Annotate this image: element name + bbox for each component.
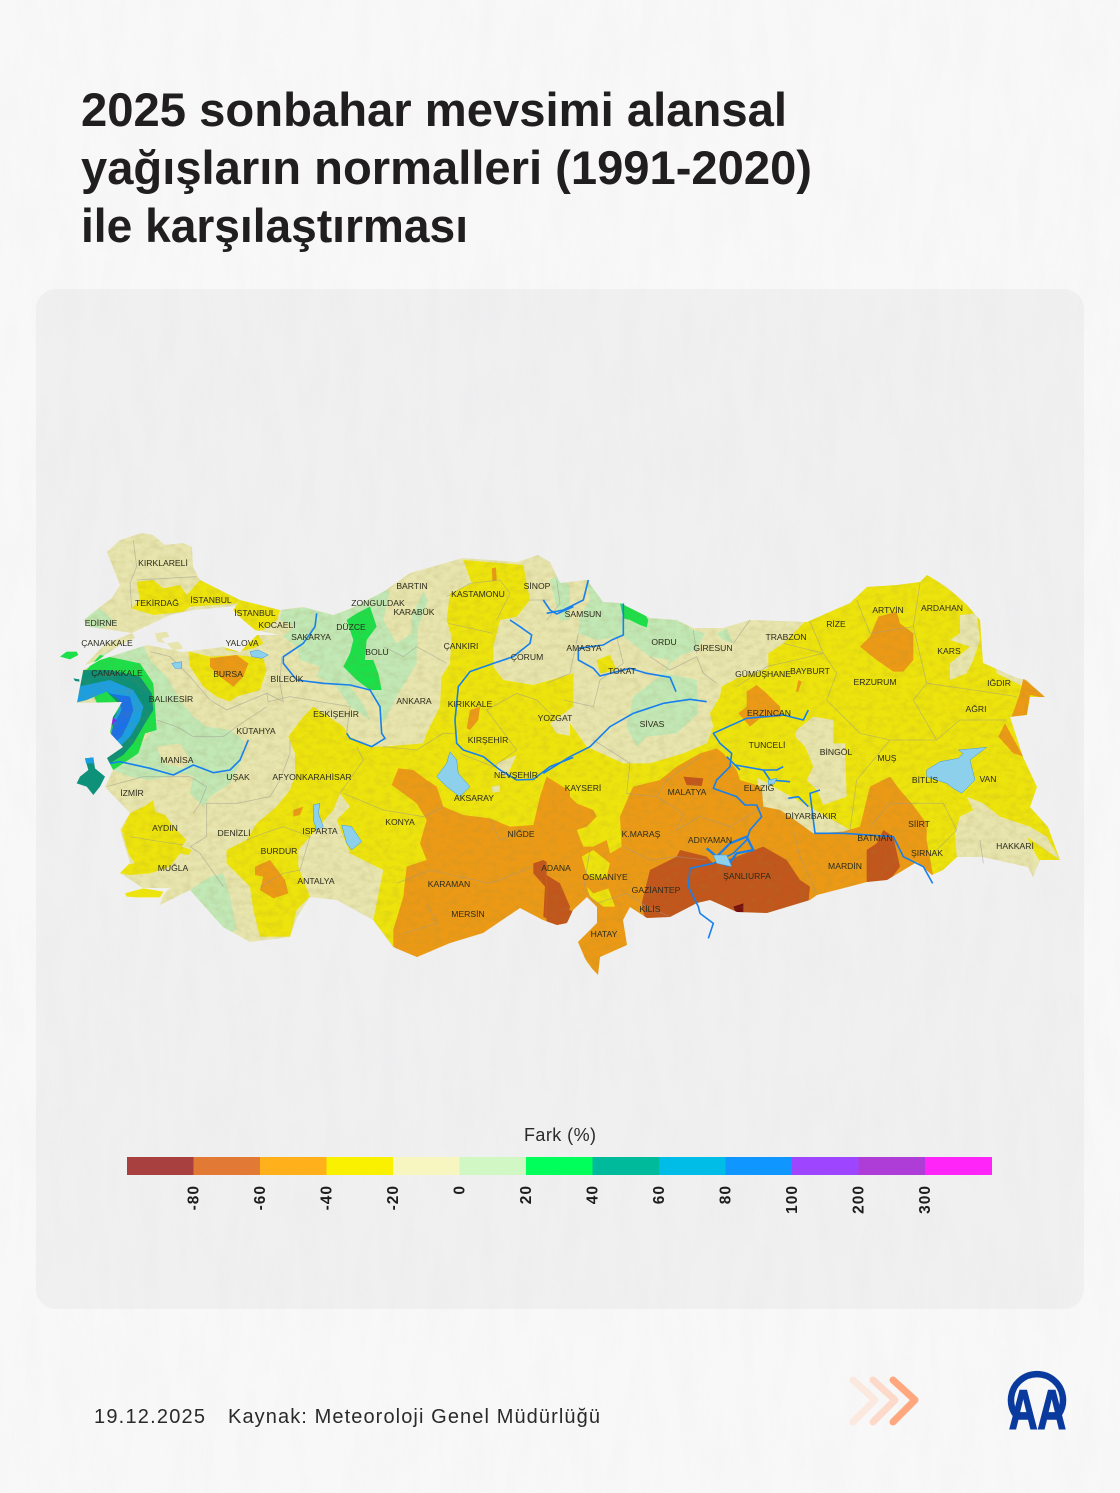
western zones (83, 575, 570, 933)
province labels: KAYSERİ (565, 783, 601, 793)
province labels: GİRESUN (693, 643, 733, 653)
province labels: ANKARA (396, 696, 432, 706)
province labels: AFYONKARAHİSAR (272, 772, 352, 782)
province labels: BURSA (213, 669, 243, 679)
legend colour bar (127, 1157, 992, 1175)
province labels: K.MARAŞ (622, 829, 661, 839)
province labels: ŞANLIURFA (723, 871, 771, 881)
legend title: Fark (%) (524, 1125, 596, 1145)
title: ile karşılaştırması (81, 199, 468, 252)
province labels: ŞIRNAK (911, 848, 943, 858)
province labels: KASTAMONU (451, 589, 505, 599)
province labels: BARTIN (396, 581, 428, 591)
legend tick labels (186, 1185, 934, 1214)
footer source: Kaynak: Meteoroloji Genel Müdürlüğü (228, 1406, 600, 1428)
footer date: 19.12.2025 (94, 1406, 205, 1428)
province labels: YALOVA (225, 638, 259, 648)
province labels: ELAZIĞ (744, 783, 775, 793)
province labels: BİLECİK (271, 674, 304, 684)
province labels: ANTALYA (297, 876, 335, 886)
title: 2025 sonbahar mevsimi alansal (81, 83, 787, 136)
legend tick labels: 0 (452, 1185, 468, 1195)
land colour zones (60, 520, 1070, 990)
province labels: SİİRT (908, 819, 931, 829)
province labels: BALIKESİR (149, 694, 193, 704)
province labels: BİNGÖL (820, 747, 852, 757)
title: yağışların normalleri (1991-2020) (81, 141, 812, 194)
province labels: KIRŞEHİR (468, 735, 508, 745)
legend tick labels: 40 (584, 1185, 602, 1204)
province labels: ADIYAMAN (688, 835, 732, 845)
province labels: NEVŞEHİR (494, 770, 538, 780)
province labels: IĞDIR (987, 678, 1011, 688)
province labels: ORDU (651, 637, 677, 647)
province labels: ERZURUM (854, 677, 896, 687)
title (81, 83, 812, 252)
province labels: KIRKLARELİ (138, 558, 188, 568)
province labels: DİYARBAKIR (785, 811, 837, 821)
legend tick labels: -60 (252, 1185, 269, 1210)
panel: map card (36, 289, 1084, 1309)
province labels: İSTANBUL (234, 608, 276, 618)
province labels: KARAMAN (428, 879, 470, 889)
offshore islands (60, 632, 183, 897)
province labels: ISPARTA (302, 826, 338, 836)
province labels: ESKİŞEHİR (313, 709, 359, 719)
icon: AA logo: AA (1009, 1378, 1066, 1441)
province labels: AYDIN (152, 823, 178, 833)
province labels: BAYBURT (790, 666, 831, 676)
legend tick labels: -40 (318, 1185, 336, 1210)
icon: AA logo (1009, 1374, 1066, 1441)
province labels: ZONGULDAK (351, 598, 405, 608)
province labels: SAKARYA (291, 632, 331, 642)
province labels: ÇANAKKALE (81, 638, 133, 648)
province labels: ARDAHAN (921, 603, 963, 613)
province labels: TOKAT (608, 666, 637, 676)
province labels: ERZİNCAN (747, 708, 791, 718)
province labels: OSMANİYE (582, 872, 628, 882)
province labels: HAKKARİ (996, 841, 1034, 851)
province labels: SİNOP (524, 581, 551, 591)
legend tick labels: 80 (718, 1185, 734, 1204)
province labels: RİZE (826, 619, 846, 629)
province labels: ÇANKIRI (444, 641, 478, 651)
province labels: UŞAK (226, 772, 250, 782)
province labels: GÜMÜŞHANE (735, 669, 791, 679)
province labels: EDİRNE (85, 618, 117, 628)
province labels: KÜTAHYA (236, 726, 276, 736)
legend tick labels: -20 (385, 1185, 402, 1210)
province labels: MANİSA (161, 755, 194, 765)
province labels: İSTANBUL (190, 595, 232, 605)
province labels: İZMİR (120, 788, 144, 798)
province labels: AMASYA (566, 643, 602, 653)
province labels: YOZGAT (538, 713, 573, 723)
legend tick labels: 100 (784, 1185, 801, 1214)
province labels: SİVAS (640, 719, 665, 729)
province labels: SAMSUN (565, 609, 601, 619)
province labels: KOCAELİ (258, 620, 296, 630)
province labels: BATMAN (857, 833, 893, 843)
province labels: MALATYA (668, 787, 707, 797)
province labels: MARDİN (828, 861, 862, 871)
legend tick labels: 60 (651, 1185, 668, 1204)
eastern zones (578, 580, 733, 747)
province labels: AKSARAY (454, 793, 494, 803)
province labels: TUNCELİ (749, 740, 785, 750)
province labels: NİĞDE (507, 829, 535, 839)
province labels: DÜZCE (336, 622, 366, 632)
province labels: BOLU (365, 647, 389, 657)
province labels: KİLİS (639, 904, 661, 914)
province borders (107, 540, 1017, 933)
province labels: KARABÜK (393, 607, 435, 617)
province labels: MUĞLA (158, 863, 189, 873)
province labels: KARS (937, 646, 961, 656)
Canakkale wet gradient (83, 655, 157, 770)
legend tick labels: 200 (850, 1185, 868, 1214)
icon: chevrons (853, 1380, 915, 1422)
province labels: GAZİANTEP (632, 885, 681, 895)
map: Turkey precipitation anomaly (60, 520, 1070, 990)
province labels: KONYA (385, 817, 415, 827)
province labels: BİTLİS (912, 775, 938, 785)
province labels (81, 558, 1034, 939)
rivers and lakes (110, 580, 987, 938)
legend tick labels: -80 (186, 1185, 202, 1210)
legend tick labels: 300 (917, 1185, 934, 1214)
province labels: HATAY (591, 929, 618, 939)
province labels: DENİZLİ (218, 828, 250, 838)
legend (127, 1125, 992, 1214)
province labels: BURDUR (261, 846, 297, 856)
province labels: KIRIKKALE (448, 699, 492, 709)
province labels: ÇORUM (511, 652, 543, 662)
province labels: ARTVİN (872, 605, 904, 615)
province labels: TEKİRDAĞ (135, 598, 179, 608)
province labels: ADANA (541, 863, 571, 873)
province labels: ÇANAKKALE (91, 668, 143, 678)
province labels: AĞRI (965, 704, 987, 714)
province labels: MUŞ (877, 753, 897, 763)
terrain shading (60, 520, 1070, 990)
province labels: TRABZON (765, 632, 807, 642)
province labels: VAN (979, 774, 997, 784)
province labels: MERSİN (451, 909, 485, 919)
legend tick labels: 20 (518, 1185, 535, 1204)
